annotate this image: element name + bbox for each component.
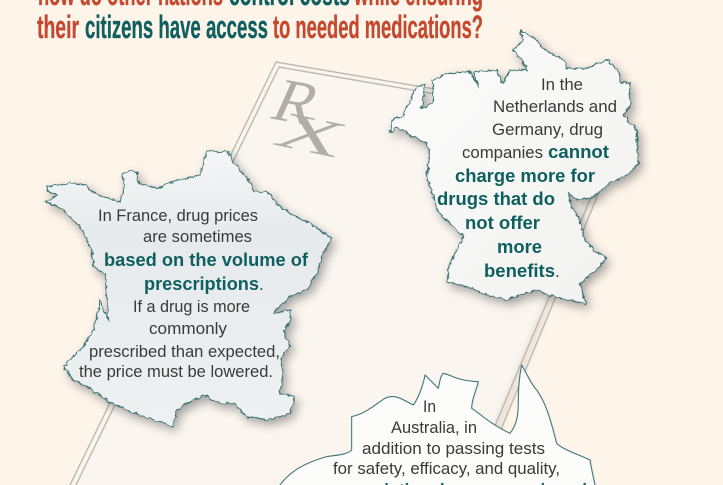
panel: Australia	[263, 365, 600, 485]
text: France: are sometimes	[143, 227, 252, 246]
text: Netherlands and Germany: drugs that do	[437, 188, 555, 209]
text: Netherlands and Germany: benefits	[484, 260, 555, 281]
text: France: If a drug is more	[133, 297, 250, 316]
text: France: prescriptions	[144, 273, 259, 294]
text: France: the price must be lowered.	[79, 362, 273, 381]
text: France: commonly	[149, 319, 227, 338]
text: Australia	[333, 397, 587, 485]
panel: France	[45, 152, 332, 427]
title	[37, 0, 483, 45]
text: France	[79, 206, 309, 381]
title: their	[37, 9, 79, 45]
text: Australia: In	[423, 397, 436, 416]
text: Netherlands and Germany: In the	[541, 75, 583, 94]
text: Netherlands and Germany: more	[497, 236, 542, 257]
map: France	[45, 152, 332, 427]
panel: Netherlands and Germany	[390, 30, 638, 305]
text: Netherlands and Germany: cannot	[548, 141, 609, 162]
icon: Rx symbol: R	[262, 66, 332, 138]
icon: Rx symbol	[262, 66, 356, 169]
text: Netherlands and Germany: companies	[462, 143, 543, 162]
text: France: based on the volume of	[104, 249, 309, 270]
title: to needed medications?	[273, 9, 483, 45]
text: Netherlands and Germany: Germany, drug	[492, 120, 603, 139]
text: France: In France, drug prices	[98, 206, 258, 225]
text: Australia: for safety, efficacy, and quality,	[333, 459, 560, 478]
text: France: .	[259, 275, 264, 294]
map: Netherlands and Germany	[390, 30, 638, 305]
text: Australia: addition to passing tests	[362, 439, 545, 458]
map: Australia	[263, 365, 600, 485]
prescription sheet	[70, 62, 628, 485]
title: citizens have access	[85, 9, 268, 45]
text: France: prescribed than expected,	[89, 342, 280, 361]
text: Netherlands and Germany: .	[555, 262, 560, 281]
text: Australia: Australia, in	[391, 418, 477, 437]
text: Netherlands and Germany: charge more for	[455, 165, 595, 186]
text: Netherlands and Germany: not offer	[465, 212, 540, 233]
text: Netherlands and Germany: Netherlands and	[493, 97, 617, 116]
icon: Rx symbol: X	[266, 102, 356, 169]
text: Netherlands and Germany	[437, 75, 617, 281]
